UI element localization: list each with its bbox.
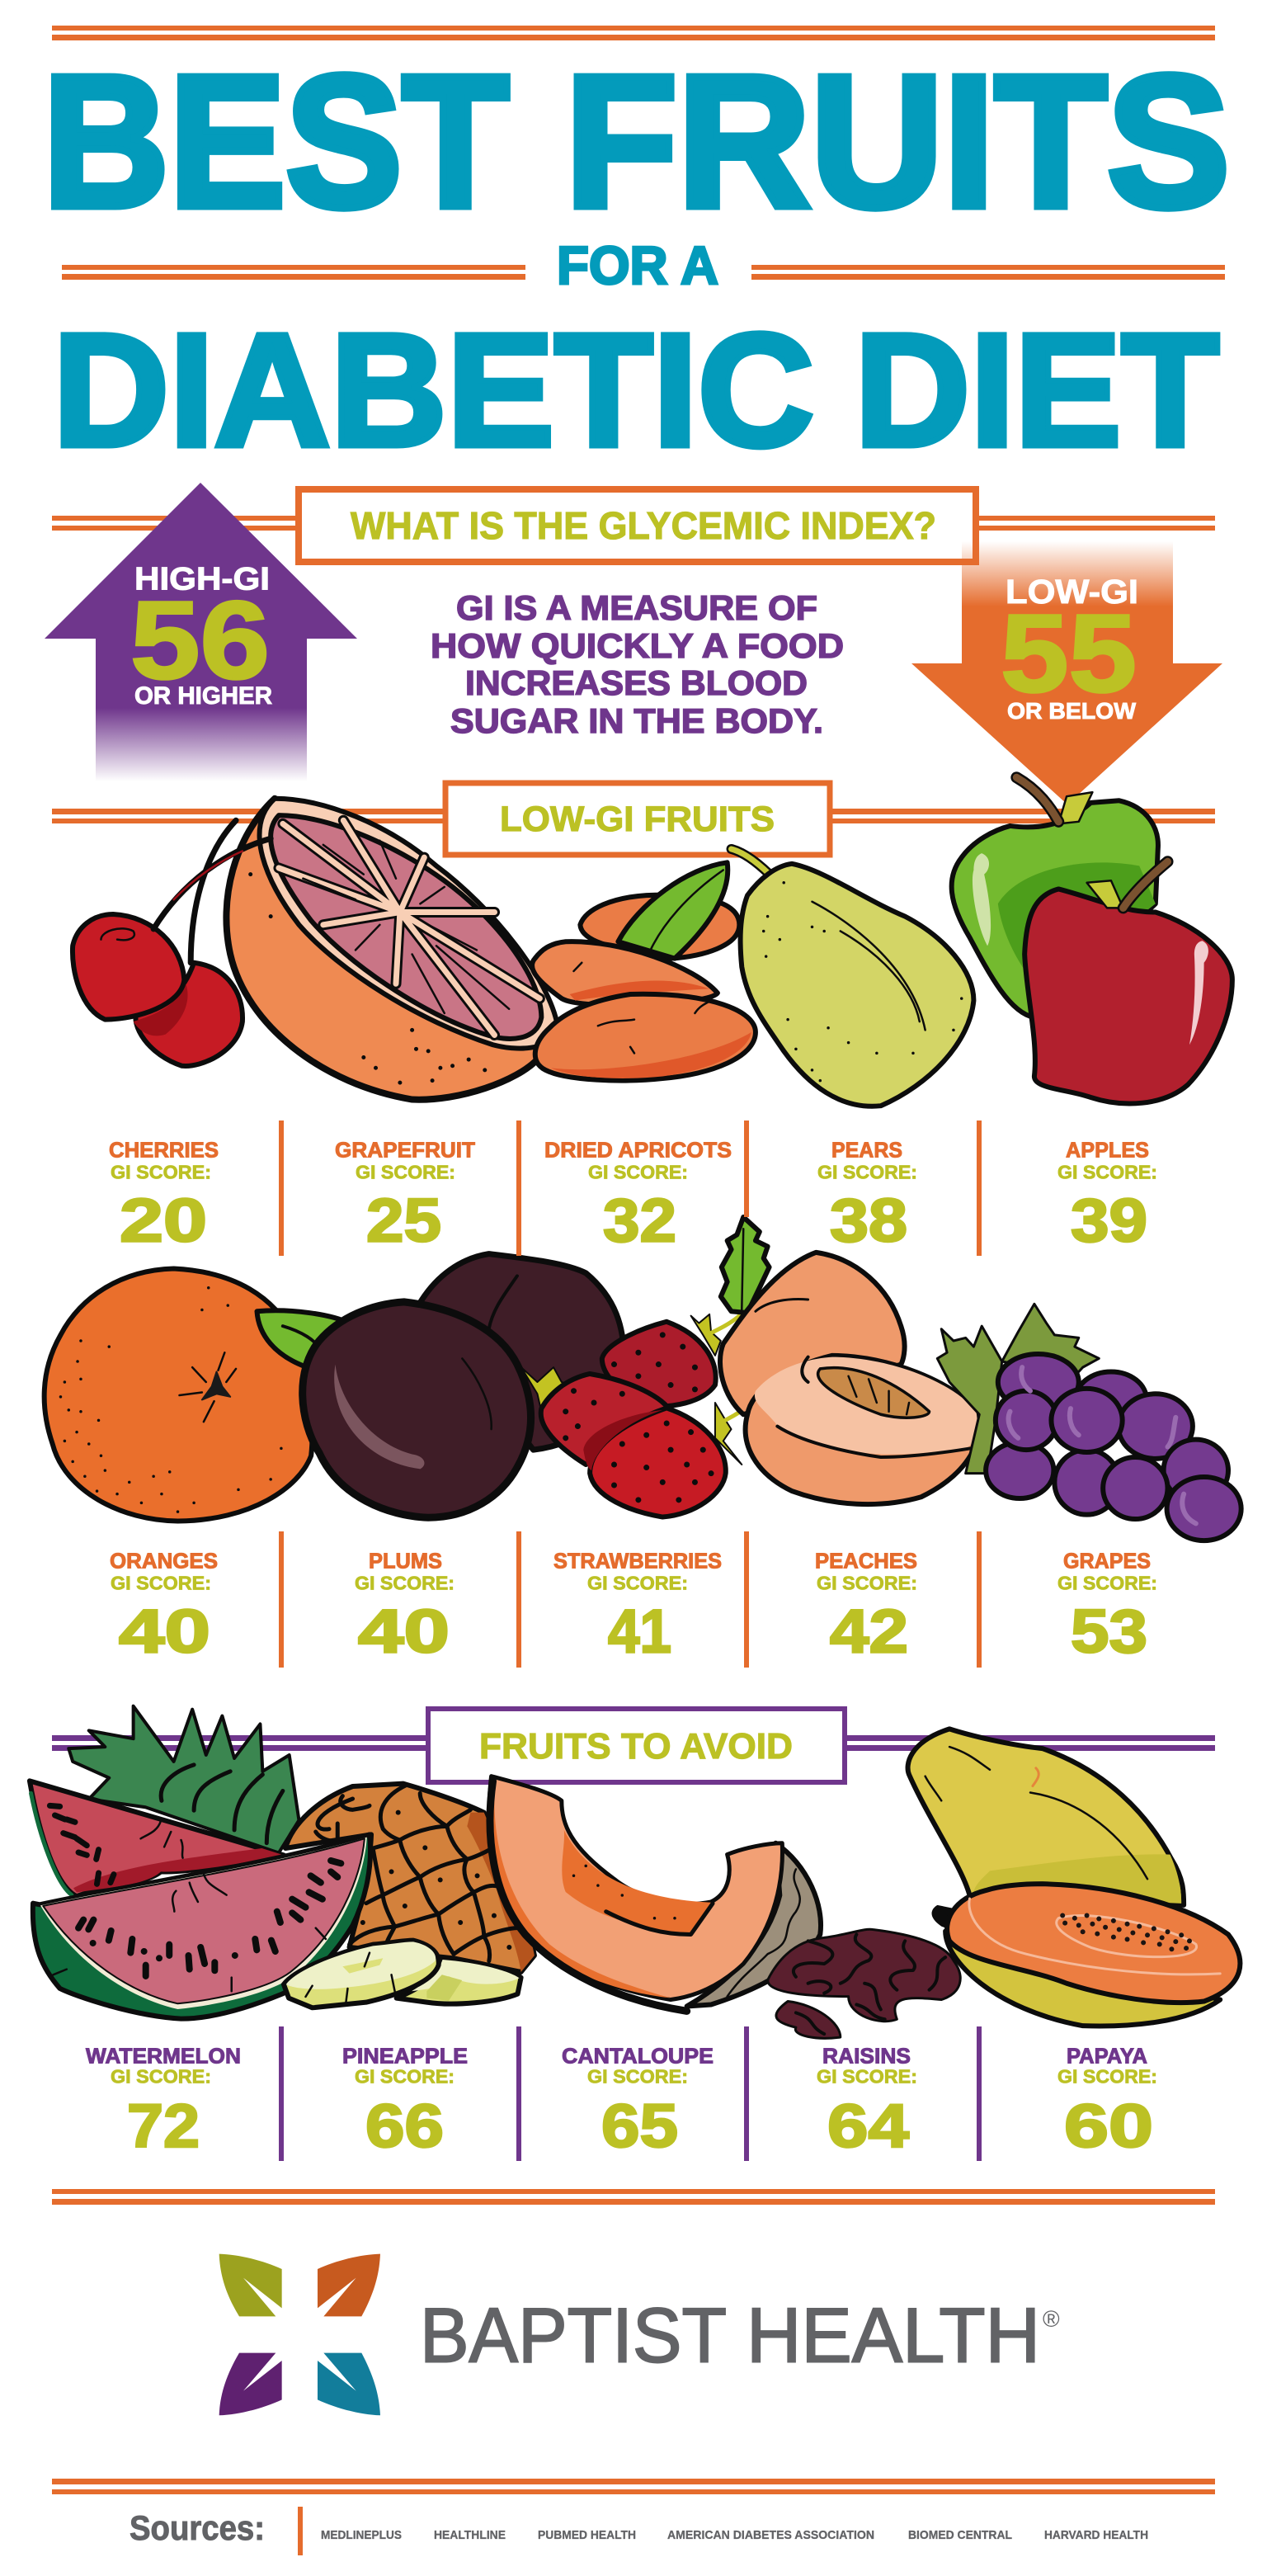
high-gi arrow: OR HIGHER bbox=[134, 682, 272, 710]
icon: logo leaves bbox=[219, 2254, 380, 2415]
logo wordmark: BAPTIST bbox=[420, 2292, 727, 2378]
icon: raisins bbox=[768, 1929, 960, 2038]
label: dried apricots 32: DRIED APRICOTS bbox=[544, 1137, 732, 1162]
row 3 fruit illustrations bbox=[489, 1729, 1240, 2038]
label: raisins 64: 64 bbox=[827, 2092, 909, 2160]
label: papaya 60 bbox=[1057, 2043, 1157, 2160]
icon: peaches bbox=[720, 1253, 980, 1504]
label: grapefruit 25: GI SCORE: bbox=[356, 1162, 455, 1183]
label: cherries 20: CHERRIES bbox=[109, 1137, 219, 1162]
icon: cut papaya bbox=[932, 1884, 1240, 2026]
label: plums 40: 40 bbox=[358, 1597, 450, 1665]
row 3 labels bbox=[86, 2043, 1157, 2160]
gi definition text: GI IS A MEASURE OF bbox=[456, 588, 817, 627]
title: best fruits for a diabetic diet: DIABETIC bbox=[53, 300, 814, 480]
sources footer: BIOMED CENTRAL bbox=[908, 2528, 1012, 2542]
icon: back watermelon slice bbox=[30, 1781, 284, 1896]
label: raisins 64: RAISINS bbox=[822, 2043, 911, 2068]
label: grapefruit 25: GRAPEFRUIT bbox=[335, 1137, 475, 1162]
label: peaches 42: PEACHES bbox=[815, 1548, 917, 1573]
label: peaches 42 bbox=[815, 1548, 917, 1665]
low-gi arrow: OR BELOW bbox=[1007, 698, 1137, 724]
label: cherries 20: GI SCORE: bbox=[111, 1162, 211, 1183]
row 1 fruit illustrations bbox=[73, 777, 1232, 1106]
icon: strawberries bbox=[521, 1314, 760, 1517]
label: cherries 20: 20 bbox=[120, 1187, 207, 1254]
label: strawberries 41 bbox=[553, 1548, 722, 1665]
icon: plums bbox=[303, 1254, 624, 1517]
label: pineapple 66: 66 bbox=[365, 2092, 444, 2160]
label: grapes 53: GRAPES bbox=[1063, 1548, 1151, 1573]
icon: front watermelon slice bbox=[33, 1834, 370, 2019]
gi definition text: SUGAR IN THE BODY. bbox=[450, 701, 823, 740]
label: strawberries 41: GI SCORE: bbox=[587, 1573, 688, 1594]
label: papaya 60: 60 bbox=[1064, 2092, 1153, 2160]
label: pears 38: PEARS bbox=[831, 1137, 902, 1162]
low-gi arrow: LOW-GI bbox=[1006, 573, 1138, 611]
sources footer: HARVARD HEALTH bbox=[1044, 2528, 1148, 2542]
label: strawberries 41: 41 bbox=[608, 1597, 671, 1665]
label: cantaloupe 65 bbox=[562, 2043, 714, 2160]
icon: red apple bbox=[1024, 861, 1232, 1103]
glycemic index heading box bbox=[299, 489, 976, 562]
label: apples 39: APPLES bbox=[1066, 1137, 1149, 1162]
icon: pear bbox=[732, 849, 973, 1106]
label: grapefruit 25: 25 bbox=[366, 1187, 441, 1254]
label: pineapple 66: GI SCORE: bbox=[355, 2066, 455, 2088]
label: pears 38: GI SCORE: bbox=[817, 1162, 917, 1183]
label: apples 39: 39 bbox=[1071, 1187, 1147, 1254]
glycemic index heading box: WHAT IS THE GLYCEMIC INDEX? bbox=[351, 504, 936, 547]
title: best fruits for a diabetic diet bbox=[43, 37, 1230, 480]
high-gi arrow: 56 bbox=[130, 579, 270, 702]
icon: pineapple body bbox=[285, 1784, 535, 1972]
label: watermelon 72: 72 bbox=[127, 2092, 200, 2160]
low-gi fruits heading box bbox=[445, 783, 830, 855]
label: dried apricots 32: 32 bbox=[603, 1187, 676, 1254]
icon: orange bbox=[45, 1268, 312, 1522]
icon: strawberry leaf bbox=[721, 1217, 770, 1313]
high-gi arrow: HIGH-GI bbox=[134, 561, 270, 597]
label: peaches 42: GI SCORE: bbox=[817, 1573, 917, 1594]
icon: pineapple crown bbox=[68, 1706, 299, 1853]
row 1 labels bbox=[109, 1137, 1157, 1254]
title: best fruits for a diabetic diet: DIET bbox=[855, 300, 1219, 480]
row 2 fruit illustrations bbox=[45, 1217, 1241, 1540]
logo wordmark bbox=[420, 2292, 1060, 2378]
label: raisins 64: GI SCORE: bbox=[817, 2066, 917, 2088]
label: oranges 40: GI SCORE: bbox=[111, 1573, 211, 1594]
label: grapes 53: 53 bbox=[1071, 1597, 1147, 1665]
label: oranges 40 bbox=[110, 1548, 218, 1665]
icon: cantaloupe bbox=[489, 1776, 821, 2011]
label: pears 38: 38 bbox=[830, 1187, 907, 1254]
label: watermelon 72: GI SCORE: bbox=[111, 2066, 211, 2088]
label: peaches 42: 42 bbox=[830, 1597, 908, 1665]
label: pineapple 66: PINEAPPLE bbox=[342, 2043, 468, 2068]
label: pineapple 66 bbox=[342, 2043, 468, 2160]
logo wordmark: ® bbox=[1043, 2306, 1060, 2332]
label: plums 40: PLUMS bbox=[369, 1548, 442, 1573]
label: cantaloupe 65: CANTALOUPE bbox=[562, 2043, 714, 2068]
sources footer: AMERICAN DIABETES ASSOCIATION bbox=[667, 2528, 874, 2542]
sources footer: MEDLINEPLUS bbox=[321, 2528, 402, 2542]
sources footer: Sources: bbox=[130, 2508, 265, 2547]
high-gi arrow bbox=[45, 483, 357, 781]
icon: green apple bbox=[952, 777, 1158, 1017]
label: papaya 60: GI SCORE: bbox=[1057, 2066, 1157, 2088]
row 2 labels bbox=[110, 1548, 1157, 1665]
fruits to avoid heading box: FRUITS TO AVOID bbox=[479, 1726, 793, 1767]
label: plums 40: GI SCORE: bbox=[355, 1573, 455, 1594]
icon: dried apricots bbox=[532, 862, 756, 1080]
icon: grapes bbox=[937, 1304, 1241, 1540]
label: grapefruit 25 bbox=[335, 1137, 475, 1254]
label: dried apricots 32: GI SCORE: bbox=[588, 1162, 688, 1183]
gi definition text: INCREASES BLOOD bbox=[465, 663, 808, 702]
label: strawberries 41: STRAWBERRIES bbox=[553, 1548, 722, 1573]
sources footer: PUBMED HEALTH bbox=[538, 2528, 636, 2542]
label: raisins 64 bbox=[817, 2043, 917, 2160]
sources footer: HEALTHLINE bbox=[434, 2528, 506, 2542]
icon: grapefruit bbox=[226, 799, 558, 1100]
low-gi fruits heading box: LOW-GI FRUITS bbox=[500, 800, 775, 839]
gi definition text: HOW QUICKLY A FOOD bbox=[431, 626, 844, 665]
label: grapes 53: GI SCORE: bbox=[1057, 1573, 1157, 1594]
label: plums 40 bbox=[355, 1548, 455, 1665]
low-gi arrow bbox=[911, 541, 1222, 804]
label: watermelon 72: WATERMELON bbox=[86, 2043, 241, 2068]
title: best fruits for a diabetic diet: FRUITS bbox=[565, 37, 1230, 247]
label: cantaloupe 65: 65 bbox=[601, 2092, 678, 2160]
gi definition text bbox=[431, 588, 844, 740]
label: pears 38 bbox=[817, 1137, 917, 1254]
title: best fruits for a diabetic diet: FOR A bbox=[557, 235, 718, 295]
label: grapes 53 bbox=[1057, 1548, 1157, 1665]
label: oranges 40: 40 bbox=[119, 1597, 210, 1665]
title: best fruits for a diabetic diet: BEST bbox=[43, 37, 509, 247]
low-gi arrow: 55 bbox=[1001, 592, 1137, 715]
icon: banana slices bbox=[284, 1941, 521, 2007]
label: watermelon 72 bbox=[86, 2043, 241, 2160]
icon: watermelon, pineapple and bananas bbox=[30, 1781, 535, 2019]
sources footer bbox=[130, 2507, 1148, 2555]
fruits to avoid heading box bbox=[428, 1709, 845, 1782]
icon: orange leaf bbox=[257, 1310, 349, 1367]
label: dried apricots 32 bbox=[544, 1137, 732, 1254]
label: cherries 20 bbox=[109, 1137, 219, 1254]
logo wordmark: HEALTH bbox=[747, 2292, 1040, 2378]
label: papaya 60: PAPAYA bbox=[1067, 2043, 1147, 2068]
icon: cherries bbox=[73, 820, 271, 1066]
label: oranges 40: ORANGES bbox=[110, 1548, 218, 1573]
label: apples 39 bbox=[1057, 1137, 1157, 1254]
icon: whole papaya bbox=[908, 1729, 1184, 1905]
label: cantaloupe 65: GI SCORE: bbox=[587, 2066, 688, 2088]
label: apples 39: GI SCORE: bbox=[1057, 1162, 1157, 1183]
baptist health logo bbox=[219, 2254, 1060, 2415]
